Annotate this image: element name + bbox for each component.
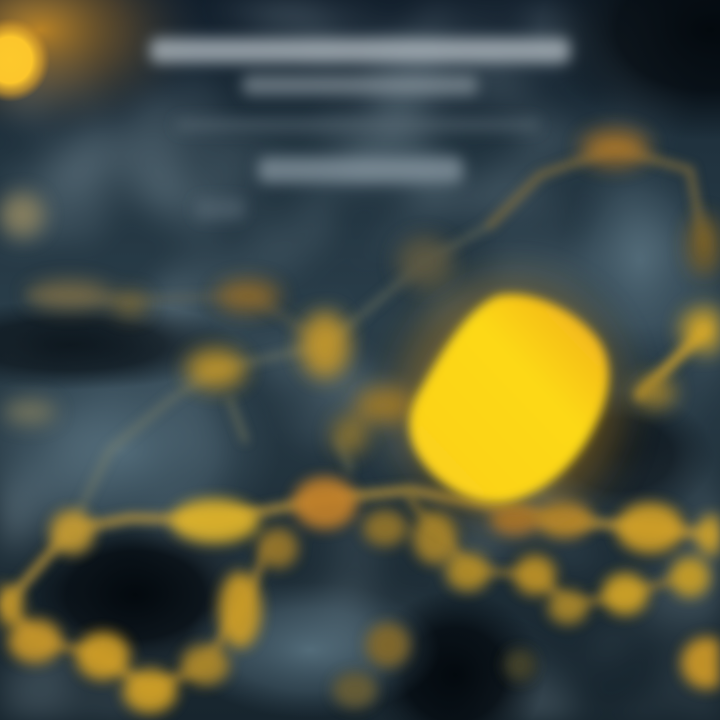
network nodes: lower (0, 477, 720, 713)
large yellow capsule (398, 282, 622, 518)
network nodes: upper (0, 130, 720, 455)
title text (150, 38, 570, 95)
sun glow top left (0, 0, 210, 140)
golden network links (5, 148, 712, 690)
subtitle text (175, 118, 540, 220)
